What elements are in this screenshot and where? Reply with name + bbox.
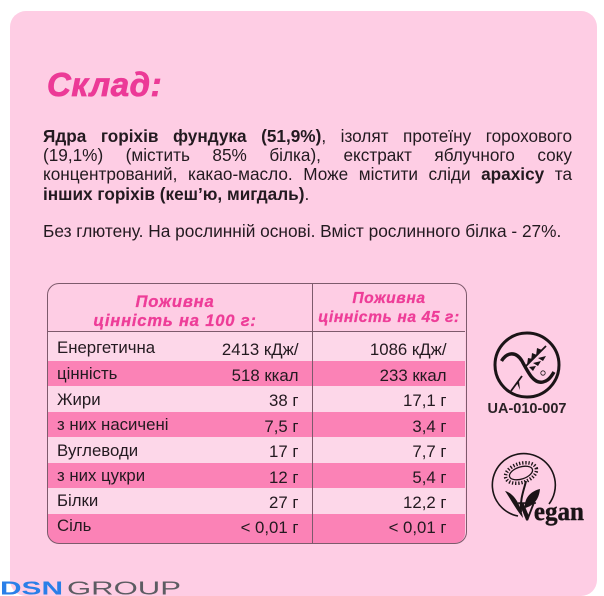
icon: gluten free badge: [488, 332, 566, 417]
header: per 100 g: Поживна: [135, 292, 215, 311]
header: per 100 g: цінність на 100 г:: [93, 310, 257, 330]
text block: ingredients: Ядра горіхів фундука (51,9%), ізолят протеїну горохового: [43, 126, 572, 146]
header: per 45 g: цінність на 45 г:: [318, 308, 460, 326]
text block: ingredients: (19,1%) (містить 85% білка), екстракт яблучного соку: [43, 145, 572, 165]
row: carbohydrates: 17 г: [269, 442, 298, 461]
row: energy: [57, 338, 446, 359]
row: energy kcal: цінність: [57, 364, 117, 383]
row: saturated: [57, 415, 446, 436]
row: sugars: з них цукри: [57, 466, 145, 485]
row: saturated: 7,5 г: [264, 417, 298, 436]
row: salt: Сіль: [57, 516, 91, 535]
row: fat: 17,1 г: [403, 391, 446, 410]
row: salt: < 0,01 г: [389, 518, 446, 537]
header: per 45 g: [318, 290, 460, 326]
row: carbohydrates: 7,7 г: [412, 442, 446, 461]
icon: vegan logo: [492, 452, 585, 526]
row: protein: Білки: [57, 491, 98, 510]
row: energy kcal: 233 ккал: [380, 366, 446, 385]
row: energy: 2413 кДж/: [222, 340, 298, 359]
header: per 45 g: Поживна: [352, 290, 426, 307]
header: per 100 g: [93, 292, 257, 330]
row: sugars: 5,4 г: [412, 468, 446, 487]
row: sugars: 12 г: [269, 468, 298, 487]
icon: gluten free badge: UA-010-007: [488, 401, 566, 417]
nutrition table: [47, 283, 467, 544]
row: protein: 27 г: [269, 493, 298, 512]
text block: ingredients: [43, 126, 572, 204]
row: saturated: з них насичені: [57, 415, 168, 434]
row: salt: < 0,01 г: [241, 518, 298, 537]
icon: vegan logo: Vegan: [518, 497, 585, 526]
row: energy kcal: 518 ккал: [232, 366, 298, 385]
row: energy kcal: [57, 364, 446, 385]
text block: ingredients: концентрований, какао-масло. Може містити сліди арахісу та: [43, 164, 572, 184]
row: carbohydrates: [57, 441, 446, 461]
text block: ingredients: інших горіхів (кеш’ю, мигдаль).: [43, 184, 309, 204]
row: energy: 1086 кДж/: [370, 340, 446, 359]
title: Склад:: [47, 66, 162, 103]
row: energy: Енергетична: [57, 338, 155, 357]
row: saturated: 3,4 г: [412, 417, 446, 436]
row: carbohydrates: Вуглеводи: [57, 441, 138, 460]
row: fat: Жири: [57, 390, 101, 409]
row: protein: 12,2 г: [403, 493, 446, 512]
text block: gluten free note: Без глютену. На рослинній основі. Вміст рослинного білка - 27%.: [43, 221, 561, 241]
row: fat: 38 г: [269, 391, 298, 410]
logo: DSN Group: [0, 578, 181, 596]
row: fat: [57, 390, 446, 410]
